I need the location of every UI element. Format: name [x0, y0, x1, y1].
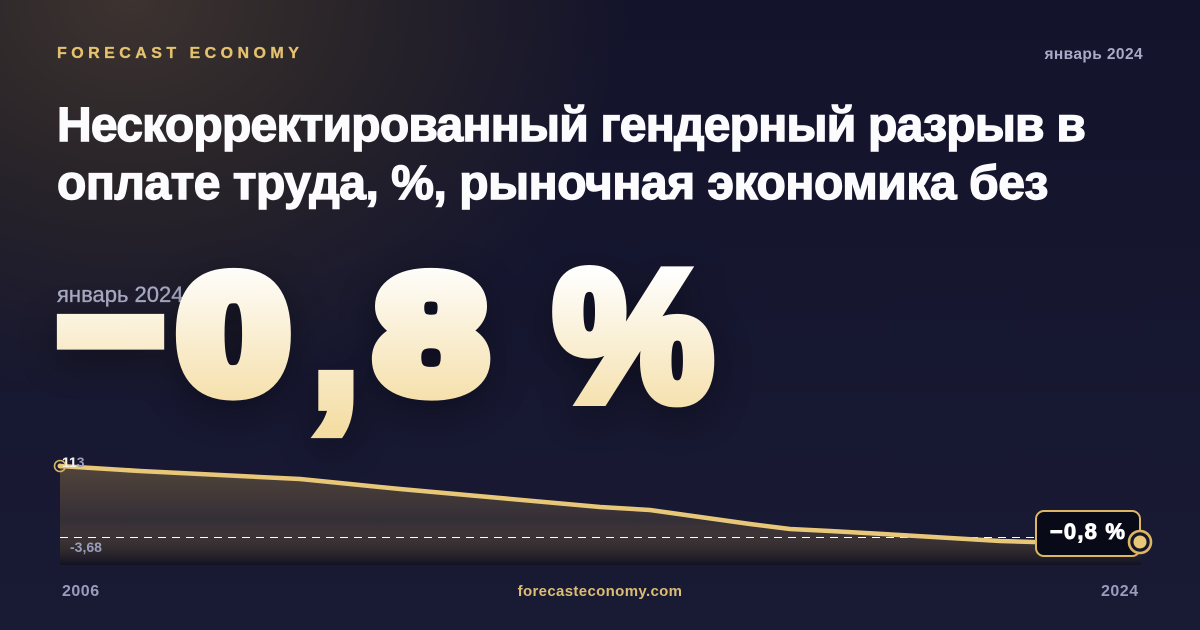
source site: forecasteconomy.com	[518, 583, 682, 600]
big value: 8	[376, 244, 486, 425]
big value: %	[554, 234, 713, 439]
title	[57, 99, 1085, 210]
reference value: -3,68	[70, 539, 102, 555]
big value: 0	[179, 244, 288, 425]
value callout	[1036, 511, 1140, 556]
big value: ,	[314, 245, 357, 442]
start value: 11	[62, 454, 77, 470]
period label: январь 2024	[57, 282, 184, 307]
start year: 2006	[62, 583, 100, 600]
brand label: FORECAST ECONOMY	[57, 45, 303, 62]
start value: 113	[62, 454, 85, 470]
reference line	[60, 536, 1140, 538]
date label: январь 2024	[1044, 46, 1143, 63]
big value: −	[48, 145, 173, 510]
start marker	[54, 460, 66, 472]
area fill	[60, 466, 1141, 565]
end year: 2024	[1101, 583, 1139, 600]
end marker	[1129, 531, 1151, 553]
trend line	[60, 466, 1140, 545]
value callout: −0,8 %	[1050, 519, 1126, 544]
title: Нескорректированный гендерный разрыв в	[57, 99, 1085, 152]
title: оплате труда, %, рыночная экономика без	[57, 157, 1048, 210]
